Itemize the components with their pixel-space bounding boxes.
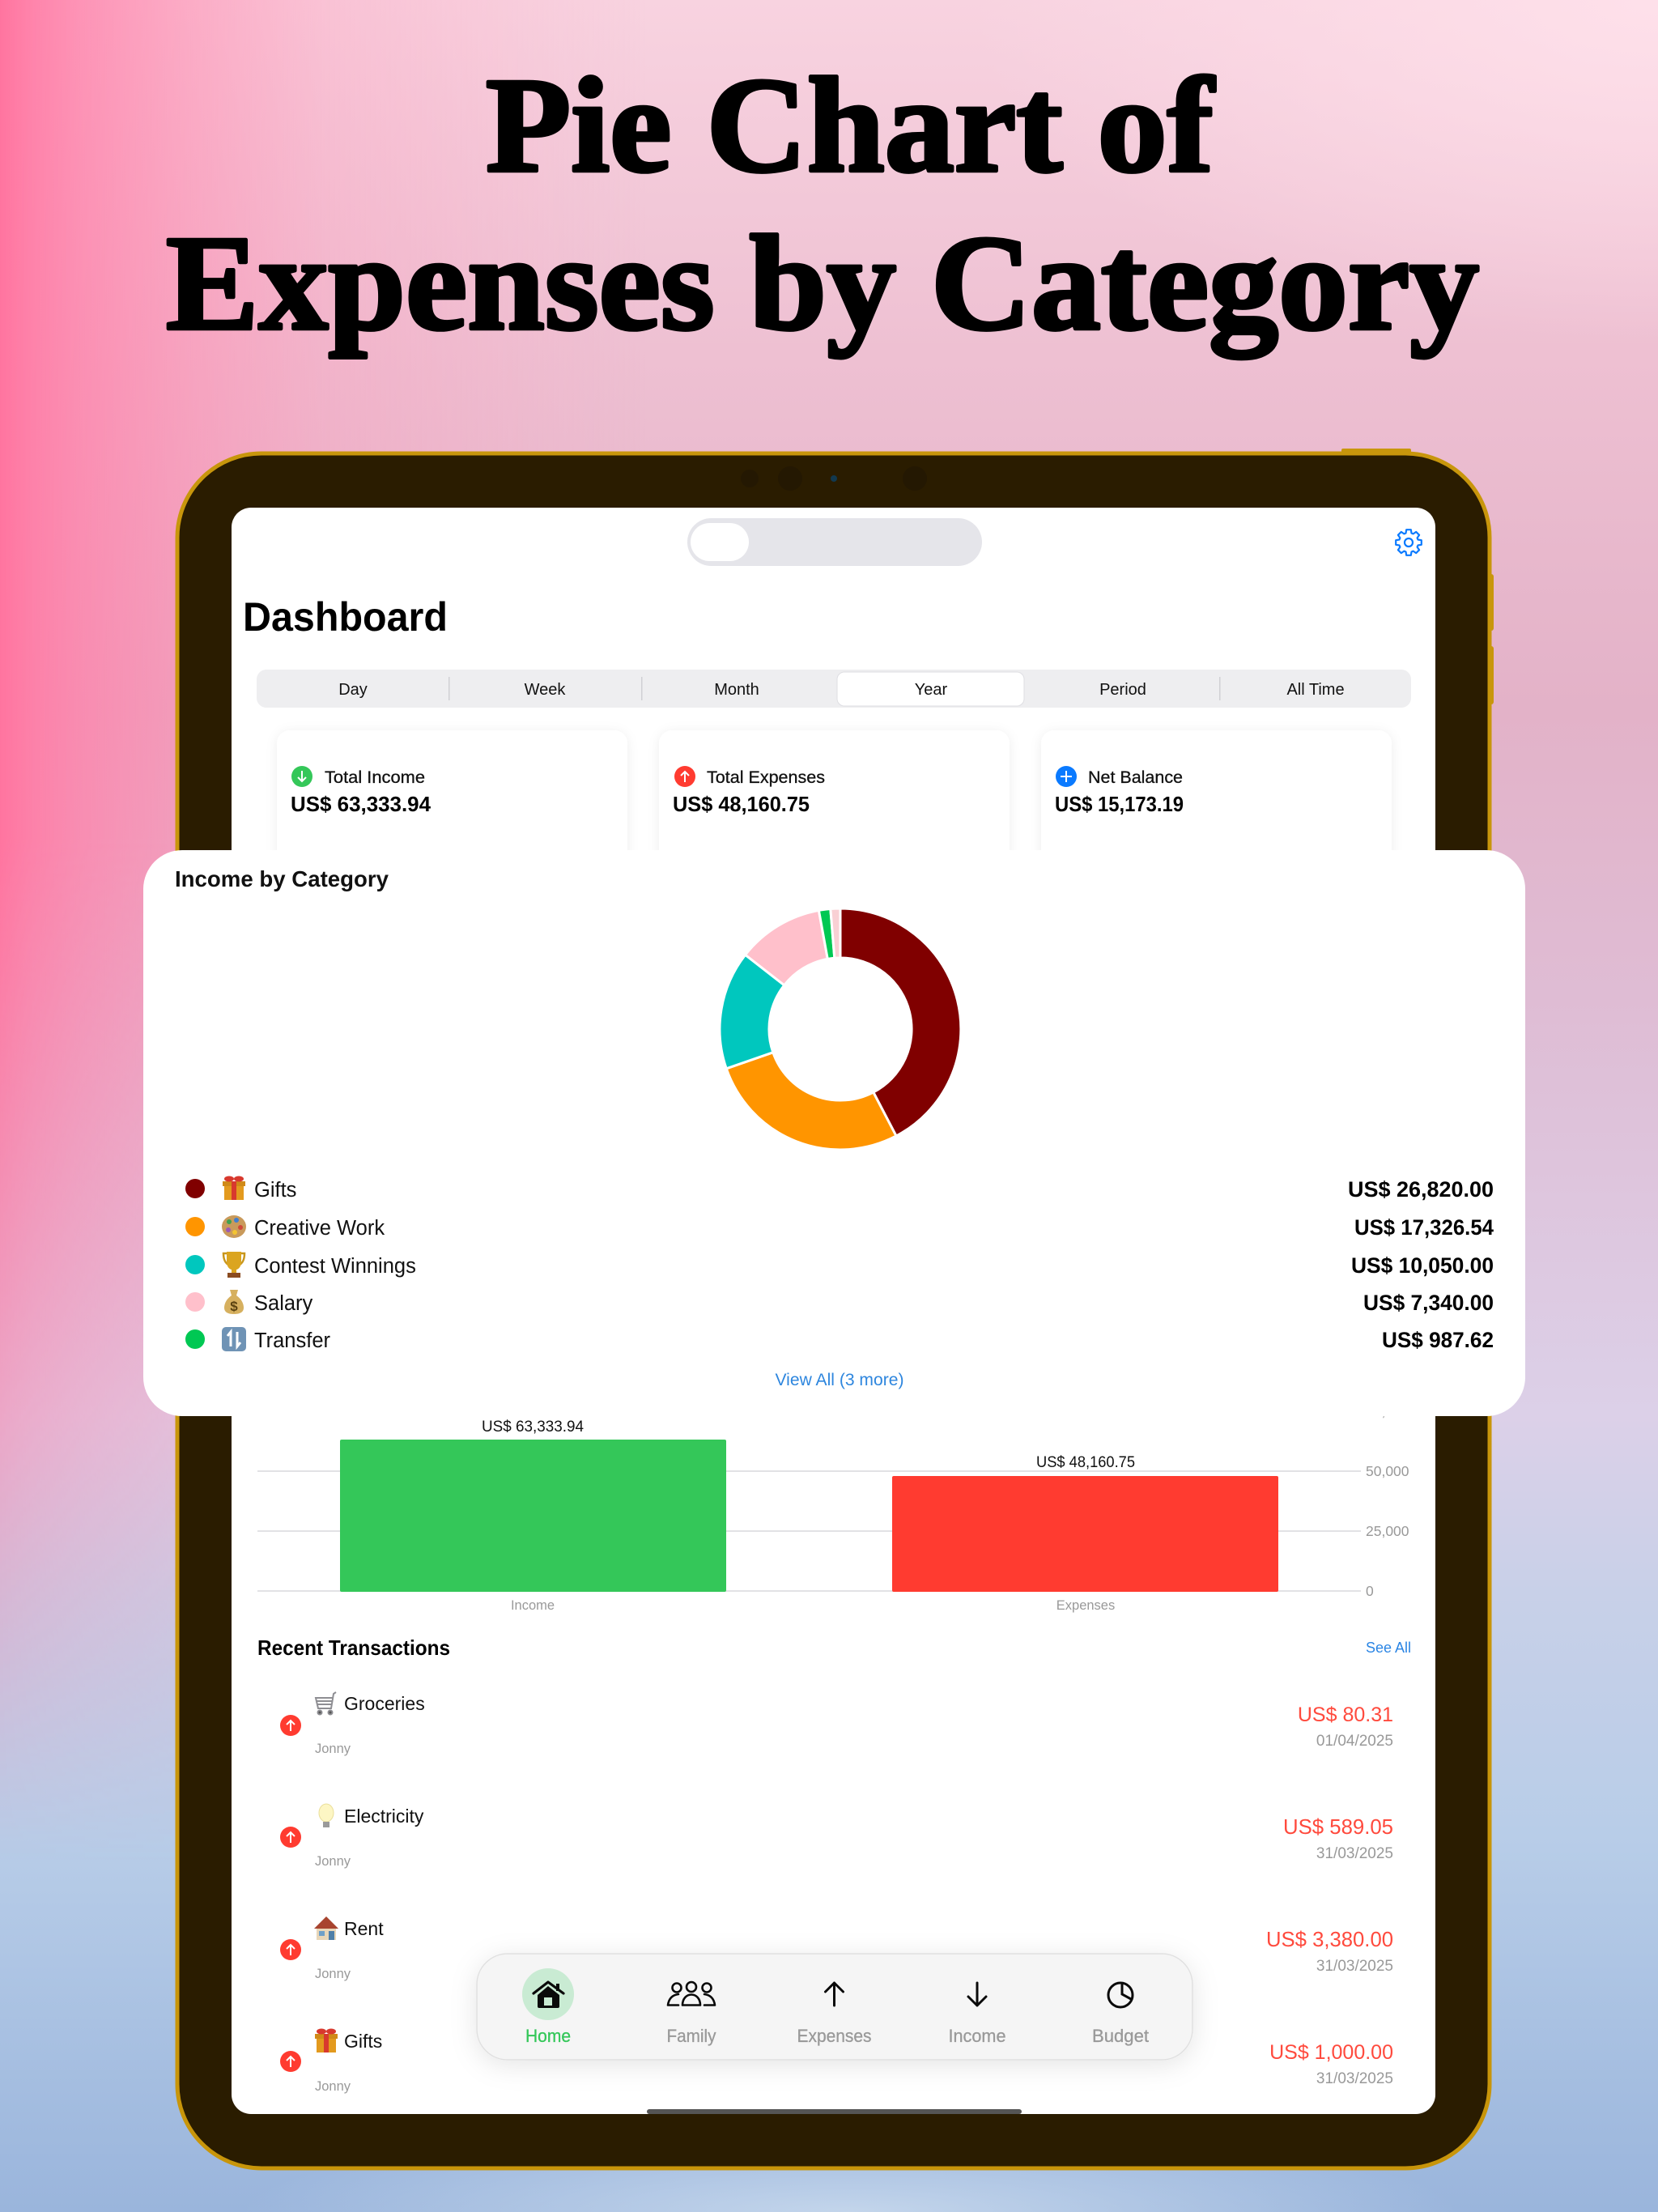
icon: light bulb — [319, 1804, 334, 1827]
transaction: Gifts: 31/03/2025 — [1316, 2070, 1393, 2087]
expense marker — [280, 1715, 301, 1736]
summary card: total income: US$ 63,333.94 — [291, 792, 432, 816]
tab: Expenses — [797, 1983, 871, 2046]
tab: Family: Family — [667, 2026, 716, 2046]
transaction: Rent: US$ 3,380.00 — [1266, 1929, 1393, 1951]
icon: transfer arrows — [222, 1327, 246, 1351]
legend: Gifts: US$ 26,820.00 — [1348, 1177, 1494, 1202]
icon: people — [668, 1982, 715, 2005]
transaction: Rent: Rent — [344, 1918, 384, 1939]
title — [166, 50, 1479, 359]
transaction: Groceries: US$ 80.31 — [1298, 1704, 1393, 1726]
icon: money bag — [224, 1290, 244, 1314]
legend: Creative Work — [185, 1215, 1494, 1240]
heading: Recent Transactions: Recent Transactions — [257, 1636, 450, 1660]
legend: Contest Winnings — [185, 1252, 1494, 1278]
summary card: total expenses: US$ 48,160.75 — [673, 792, 810, 816]
tab: Income — [949, 1983, 1005, 2046]
summary card: total income: Total Income — [325, 768, 425, 787]
side volume buttons — [1486, 574, 1494, 704]
home indicator — [647, 2109, 1022, 2114]
title line 1: Pie Chart of — [486, 50, 1215, 201]
legend: Salary: US$ 7,340.00 — [1363, 1291, 1494, 1315]
tab: Budget: Budget — [1092, 2026, 1149, 2046]
transaction: Electricity — [280, 1804, 1393, 1869]
icon: gift — [223, 1176, 245, 1200]
period segmented control: Day — [338, 681, 368, 699]
transaction: Gifts: Jonny — [315, 2079, 351, 2094]
icon: up arrow — [674, 766, 695, 787]
legend: Transfer: Transfer — [254, 1329, 331, 1352]
panel: income by category — [143, 850, 1525, 1416]
title line 2: Expenses by Category — [166, 208, 1479, 359]
bar value labels — [482, 1419, 1135, 1471]
tab: Expenses: Expenses — [797, 2026, 871, 2046]
legend: Salary: Salary — [254, 1292, 313, 1315]
legend: Creative Work: Creative Work — [254, 1217, 385, 1240]
transaction: Rent: 31/03/2025 — [1316, 1958, 1393, 1975]
legend: Transfer — [185, 1327, 1494, 1352]
expense marker — [280, 2051, 301, 2072]
expense marker — [280, 1827, 301, 1848]
summary card: net balance: US$ 15,173.19 — [1055, 792, 1184, 816]
transaction: Rent — [280, 1916, 1393, 1981]
bar value labels: US$ 63,333.94 — [482, 1419, 584, 1436]
device body — [177, 453, 1490, 2168]
transaction: Gifts — [280, 2029, 1393, 2094]
transaction: Groceries: Groceries — [344, 1693, 425, 1714]
icon: cart — [316, 1692, 336, 1715]
tab: Family — [667, 1982, 716, 2046]
legend: Contest Winnings: Contest Winnings — [254, 1255, 416, 1278]
appearance toggle — [687, 518, 982, 566]
top hardware button — [1341, 449, 1411, 457]
summary card: total expenses: Total Expenses — [707, 768, 825, 787]
donut chart — [720, 908, 961, 1150]
transaction: Electricity: 31/03/2025 — [1316, 1845, 1393, 1862]
bar chart: income vs expenses: Expenses — [1056, 1598, 1115, 1613]
bar: income — [340, 1440, 726, 1592]
icon: house — [534, 1982, 563, 2008]
icon: gift — [315, 2029, 338, 2052]
tablet device — [177, 449, 1494, 2168]
icon: plus — [1056, 766, 1077, 787]
period segmented control: Month — [714, 681, 759, 699]
expense marker — [280, 1939, 301, 1960]
axis labels: 50,000 — [1366, 1463, 1409, 1479]
axis labels: 25,000 — [1366, 1523, 1409, 1539]
summary card: total income — [277, 748, 628, 850]
transaction: Electricity: US$ 589.05 — [1283, 1816, 1393, 1839]
axis labels: 0 — [1366, 1583, 1374, 1599]
legend: Salary — [185, 1290, 1494, 1315]
bar chart: income vs expenses: Income — [511, 1598, 555, 1613]
icon: money bag: $ — [230, 1299, 238, 1314]
legend: Gifts — [185, 1176, 1494, 1202]
icon: trophy — [223, 1252, 244, 1278]
summary card: net balance: Net Balance — [1088, 768, 1183, 787]
legend: Contest Winnings: US$ 10,050.00 — [1351, 1253, 1494, 1278]
transaction: Groceries — [280, 1692, 1393, 1756]
heading: Recent Transactions: See All — [1366, 1640, 1411, 1656]
transaction: Electricity: Electricity — [344, 1806, 424, 1827]
bar chart: income vs expenses — [257, 1403, 1409, 1613]
legend: Transfer: US$ 987.62 — [1382, 1328, 1494, 1352]
bar: expenses — [892, 1476, 1278, 1592]
tab: Home: Home — [525, 2026, 571, 2046]
tab: Home — [522, 1968, 574, 2046]
icon: settings gear — [1396, 530, 1422, 555]
bottom tab bar — [477, 1954, 1192, 2060]
icon: down arrow — [291, 766, 312, 787]
period segmented control: Week — [525, 681, 566, 699]
transaction: Gifts: US$ 1,000.00 — [1269, 2041, 1393, 2064]
panel heading: Income by Category — [175, 866, 389, 891]
view all link: View All (3 more) — [776, 1371, 903, 1389]
transaction: Groceries: 01/04/2025 — [1316, 1733, 1393, 1750]
period segmented control: Period — [1099, 681, 1146, 699]
axis labels — [1367, 1416, 1409, 1596]
bar value labels: US$ 48,160.75 — [1036, 1454, 1135, 1471]
icon: house — [314, 1916, 338, 1940]
legend: Gifts: Gifts — [254, 1179, 296, 1202]
period segmented control: All Time — [1286, 681, 1345, 699]
cameras — [741, 466, 927, 491]
tab: Income: Income — [949, 2026, 1005, 2046]
period segmented control: Year — [915, 681, 948, 699]
transaction: Rent: Jonny — [315, 1967, 351, 1981]
app screen — [232, 508, 1435, 2114]
legend: Creative Work: US$ 17,326.54 — [1354, 1215, 1494, 1240]
icon: palette — [222, 1215, 246, 1238]
heading: Recent Transactions — [257, 1636, 1411, 1660]
axis labels: 75,000 — [1366, 1403, 1409, 1419]
transaction: Gifts: Gifts — [344, 2031, 382, 2052]
transaction: Groceries: Jonny — [315, 1742, 351, 1756]
heading: Dashboard: Dashboard — [243, 594, 448, 640]
period segmented control — [257, 670, 1411, 708]
tab: Budget — [1092, 1983, 1149, 2046]
summary card: net balance — [1041, 748, 1392, 850]
summary card: total expenses — [659, 748, 1010, 850]
transaction: Electricity: Jonny — [315, 1854, 351, 1869]
